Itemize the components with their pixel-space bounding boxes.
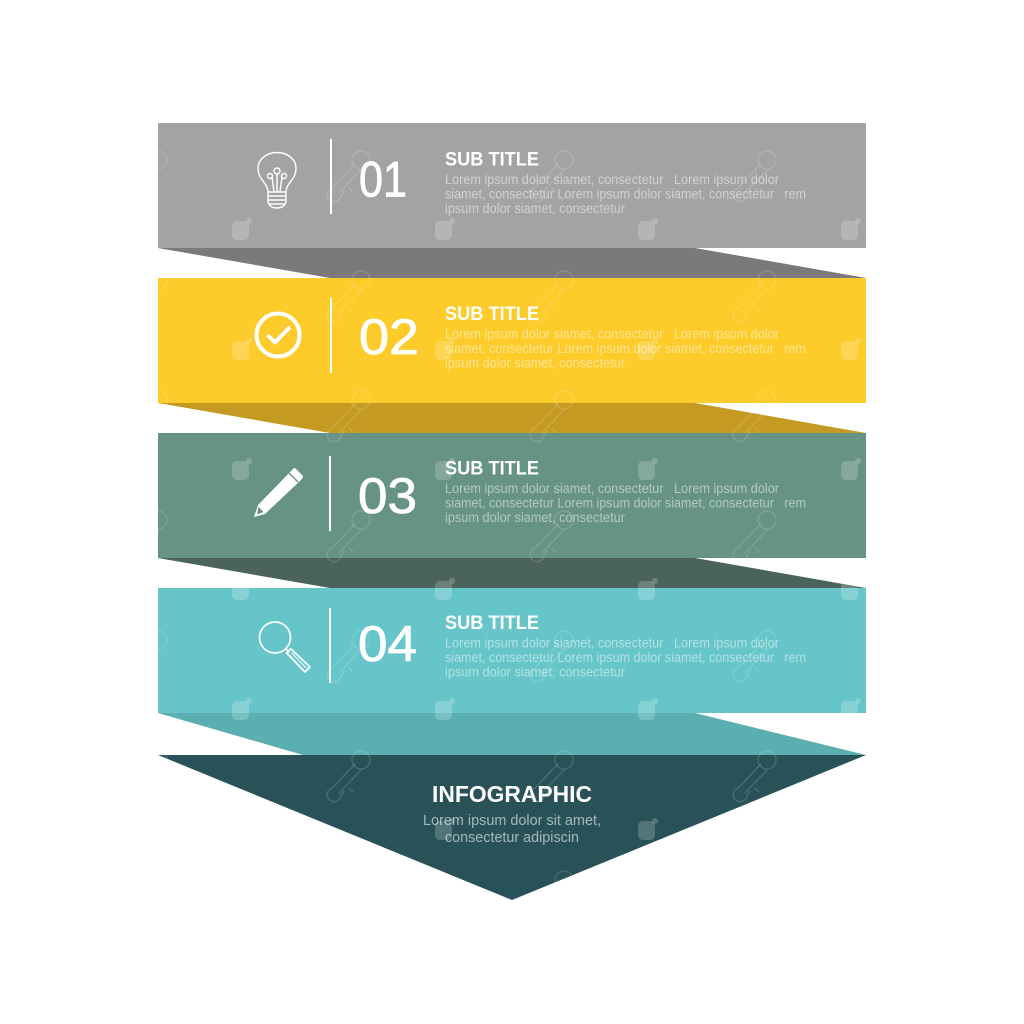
body text: ipsum dolor siamet, consectetur bbox=[445, 356, 625, 370]
body text: siamet, consectetur Lorem ipsum dolor siamet, consectetur rem bbox=[445, 341, 806, 356]
icon: check mark in circle bbox=[256, 314, 300, 356]
sub title: SUB TITLE bbox=[445, 458, 539, 480]
divider bbox=[330, 298, 332, 373]
arrow body text: consectetur adipiscin bbox=[445, 829, 579, 846]
panel: step 02 bbox=[158, 278, 866, 403]
panel: step 04 bbox=[158, 588, 866, 713]
sub title: SUB TITLE bbox=[445, 613, 539, 634]
body text: siamet, consectetur Lorem ipsum dolor siamet, consectetur rem bbox=[445, 186, 806, 202]
body text bbox=[445, 172, 806, 216]
heading: INFOGRAPHIC bbox=[432, 781, 592, 807]
body text bbox=[445, 481, 806, 525]
fold: grey to yellow bbox=[158, 248, 866, 278]
icon: pencil bbox=[254, 468, 303, 517]
body text: siamet, consectetur Lorem ipsum dolor siamet, consectetur rem bbox=[445, 650, 806, 665]
body text: Lorem ipsum dolor siamet, consectetur Lorem ipsum dolor bbox=[445, 326, 779, 342]
panel: step 01 bbox=[158, 123, 866, 248]
body text: ipsum dolor siamet, consectetur bbox=[445, 510, 625, 525]
fold: yellow to green bbox=[158, 403, 866, 433]
fold: green to teal bbox=[158, 558, 866, 588]
body text: Lorem ipsum dolor siamet, consectetur Lorem ipsum dolor bbox=[445, 636, 779, 650]
sub title: SUB TITLE bbox=[445, 304, 539, 325]
divider bbox=[329, 608, 331, 683]
arrow body text: Lorem ipsum dolor sit amet, bbox=[423, 812, 601, 829]
body text: ipsum dolor siamet, consectetur bbox=[445, 664, 625, 680]
icon: light bulb bbox=[258, 152, 296, 208]
divider bbox=[330, 139, 332, 214]
body text bbox=[445, 636, 806, 680]
body text: siamet, consectetur Lorem ipsum dolor siamet, consectetur rem bbox=[445, 496, 806, 510]
body text: ipsum dolor siamet, consectetur bbox=[445, 201, 625, 216]
fold: teal to arrow bbox=[158, 713, 866, 755]
panel: step 03 bbox=[158, 433, 866, 558]
body text: Lorem ipsum dolor siamet, consectetur Lorem ipsum dolor bbox=[445, 481, 779, 496]
divider bbox=[329, 456, 331, 531]
number 04: 04 bbox=[358, 616, 417, 672]
icon: magnifying glass bbox=[260, 622, 310, 672]
body text bbox=[445, 326, 806, 370]
arrow body text bbox=[423, 812, 601, 846]
sub title: SUB TITLE bbox=[445, 150, 539, 170]
number 02: 02 bbox=[359, 309, 419, 365]
body text: Lorem ipsum dolor siamet, consectetur Lorem ipsum dolor bbox=[445, 172, 779, 187]
number 03: 03 bbox=[358, 468, 417, 524]
number 01: 01 bbox=[359, 152, 407, 208]
panel: bottom arrow bbox=[158, 755, 866, 900]
